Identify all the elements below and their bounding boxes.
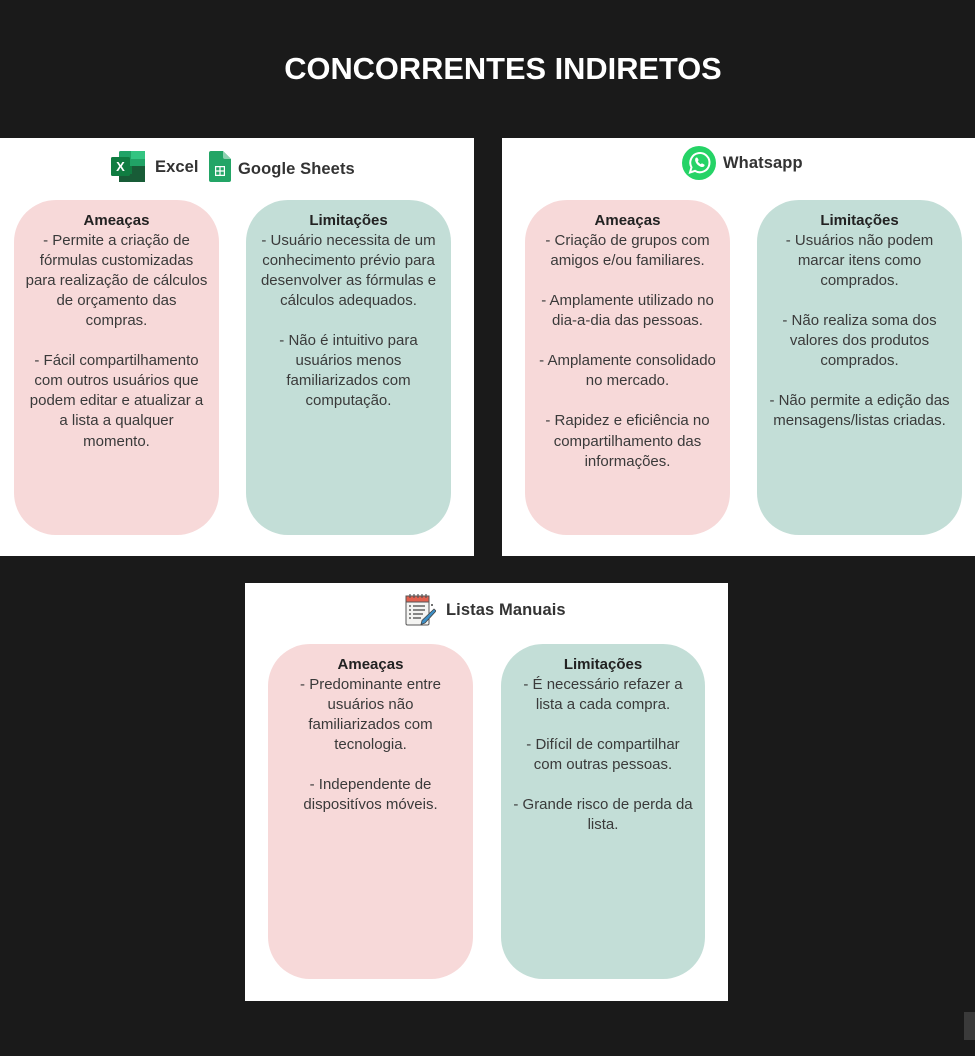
limitations: Excel: conhecimento prévio para <box>262 252 435 269</box>
limitations: Excel: desenvolver as fórmulas e <box>261 272 436 289</box>
threats: Excel: para realização de cálculos <box>26 272 207 289</box>
threats: Excel: Ameaças <box>84 212 149 229</box>
threats: Whatsapp: - Rapidez e eficiência no <box>545 412 710 429</box>
limitations: Excel: cálculos adequados. <box>280 292 417 309</box>
limitations: Whatsapp: - Usuários não podem <box>786 232 933 249</box>
limitations: Excel: - Usuário necessita de um <box>261 232 436 249</box>
limitations: Excel: - Não é intuitivo para <box>279 332 418 349</box>
corner control <box>964 1012 975 1040</box>
limitations: Listas Manuais: - Grande risco de perda da <box>513 796 693 813</box>
threats: Whatsapp: - Amplamente consolidado <box>539 352 716 369</box>
limitations: Whatsapp: mensagens/listas criadas. <box>773 412 946 429</box>
limitations: Whatsapp <box>757 200 962 535</box>
limitations: Whatsapp: - Não realiza soma dos <box>782 312 937 329</box>
threats: Excel <box>14 200 219 535</box>
icon: Excel: X <box>116 159 125 174</box>
limitations: Listas Manuais <box>501 644 705 979</box>
threats: Listas Manuais: - Independente de <box>310 776 431 793</box>
limitations: Listas Manuais: Limitações <box>564 656 642 673</box>
limitations: Whatsapp: valores dos produtos <box>790 332 929 349</box>
threats: Excel: compras. <box>86 312 147 329</box>
threats: Whatsapp: - Criação de grupos com <box>545 232 710 249</box>
threats: Whatsapp: informações. <box>585 453 670 470</box>
panel: Listas Manuais <box>245 583 728 1001</box>
limitations: Whatsapp: Limitações <box>820 212 899 229</box>
icon: notepad <box>406 594 436 626</box>
limitations: Whatsapp: comprados. <box>820 272 899 289</box>
threats: Whatsapp: compartilhamento das <box>554 433 701 450</box>
threats: Listas Manuais: usuários não <box>328 696 413 713</box>
threats: Excel: - Fácil compartilhamento <box>34 352 199 369</box>
heading: Google Sheets: Google Sheets <box>238 160 355 178</box>
threats: Excel: - Permite a criação de <box>43 232 190 249</box>
limitations: Listas Manuais: lista. <box>588 816 618 833</box>
threats: Listas Manuais: tecnologia. <box>334 736 407 753</box>
threats: Excel: com outros usuários que <box>34 372 199 389</box>
limitations: Whatsapp: comprados. <box>820 352 899 369</box>
limitations: Listas Manuais: - Difícil de compartilhar <box>526 736 680 753</box>
threats: Listas Manuais: dispositívos móveis. <box>303 796 438 813</box>
heading: Excel: Excel <box>155 158 199 176</box>
panel: Excel and Google Sheets <box>0 138 474 556</box>
heading: Whatsapp: Whatsapp <box>723 154 803 172</box>
threats: Listas Manuais <box>268 644 473 979</box>
threats: Excel: fórmulas customizadas <box>40 252 193 269</box>
threats: Whatsapp: no mercado. <box>586 372 669 389</box>
panel: Whatsapp <box>502 138 975 556</box>
threats: Excel: a lista a qualquer <box>59 412 174 429</box>
limitations: Excel <box>246 200 451 535</box>
limitations: Whatsapp: - Não permite a edição das <box>769 392 950 409</box>
threats: Whatsapp: amigos e/ou familiares. <box>550 252 705 269</box>
limitations: Whatsapp: marcar itens como <box>798 252 921 269</box>
threats: Excel: podem editar e atualizar a <box>30 392 203 409</box>
threats: Listas Manuais: Ameaças <box>338 656 403 673</box>
threats: Whatsapp: - Amplamente utilizado no <box>541 292 714 309</box>
limitations: Listas Manuais: - É necessário refazer a <box>523 676 683 693</box>
threats: Whatsapp: dia-a-dia das pessoas. <box>552 312 703 329</box>
limitations: Excel: familiarizados com <box>286 372 411 389</box>
limitations: Excel: Limitações <box>309 212 388 229</box>
icon: Excel <box>111 151 145 182</box>
threats: Listas Manuais: - Predominante entre <box>300 676 441 693</box>
heading: Listas Manuais: Listas Manuais <box>446 601 566 619</box>
limitations: Excel: computação. <box>306 392 391 409</box>
threats: Listas Manuais: familiarizados com <box>308 716 433 733</box>
limitations: Excel: usuários menos <box>296 352 401 369</box>
limitations: Listas Manuais: lista a cada compra. <box>536 696 670 713</box>
icon: Google Sheets <box>209 151 231 182</box>
limitations: Listas Manuais: com outras pessoas. <box>534 756 672 773</box>
threats: Whatsapp: Ameaças <box>595 212 660 229</box>
icon: Whatsapp <box>682 146 716 180</box>
threats: Whatsapp <box>525 200 730 535</box>
title: CONCORRENTES INDIRETOS <box>284 51 722 86</box>
threats: Excel: de orçamento das <box>56 292 177 309</box>
threats: Excel: momento. <box>83 433 150 450</box>
